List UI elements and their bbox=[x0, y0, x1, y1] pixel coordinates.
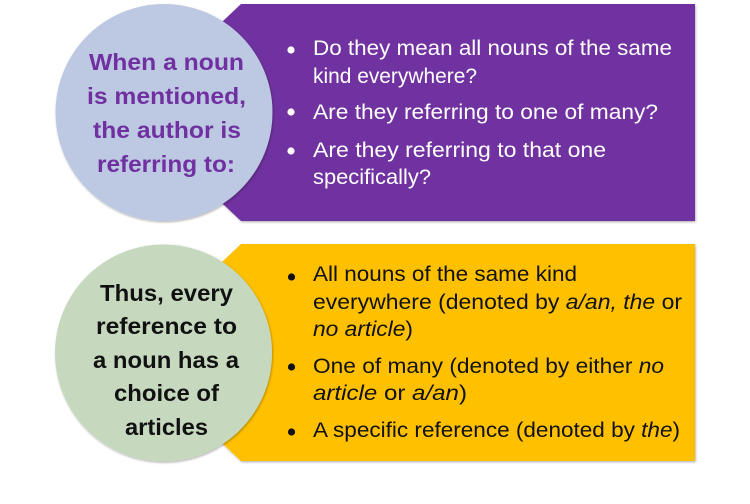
bullet list: questions: Do they mean all nouns of the same bbox=[313, 36, 672, 60]
bullet list: questions: kind everywhere? bbox=[313, 64, 477, 88]
bullet list: answers: A specific reference (denoted by the) bbox=[313, 418, 680, 442]
heading: choice of articles: articles bbox=[125, 414, 208, 440]
bullet list: answers: All nouns of the same kind bbox=[313, 262, 577, 286]
heading: choice of articles: a noun has a bbox=[93, 347, 240, 373]
bullet list: answers: everywhere (denoted by a/an, the or bbox=[313, 290, 682, 314]
heading: when a noun is mentioned bbox=[87, 49, 246, 177]
heading: when a noun is mentioned: When a noun bbox=[89, 49, 244, 75]
bullet list: questions: specifically? bbox=[313, 165, 431, 189]
bullet list: answers: no article) bbox=[313, 317, 413, 341]
heading: when a noun is mentioned: is mentioned, bbox=[87, 83, 246, 109]
bullet list: questions: Are they referring to that one bbox=[313, 138, 606, 162]
bullet list: questions: Are they referring to one of many? bbox=[313, 100, 658, 124]
heading: choice of articles: Thus, every bbox=[100, 280, 233, 306]
circle: when a noun is mentioned bbox=[56, 4, 272, 221]
panel: yellow answers bbox=[205, 244, 695, 461]
heading: choice of articles: choice of bbox=[114, 380, 219, 406]
bullet list: answers: One of many (denoted by either no bbox=[313, 354, 664, 378]
heading: choice of articles bbox=[93, 280, 240, 440]
heading: when a noun is mentioned: referring to: bbox=[97, 151, 235, 177]
bullet list: questions bbox=[287, 36, 672, 189]
panel: purple questions bbox=[205, 4, 695, 221]
bullet list: answers: article or a/an) bbox=[313, 381, 467, 405]
heading: choice of articles: reference to bbox=[96, 313, 237, 339]
heading: when a noun is mentioned: the author is bbox=[93, 117, 241, 143]
bullet list: answers bbox=[288, 262, 682, 442]
circle: every reference has a choice bbox=[55, 244, 272, 462]
